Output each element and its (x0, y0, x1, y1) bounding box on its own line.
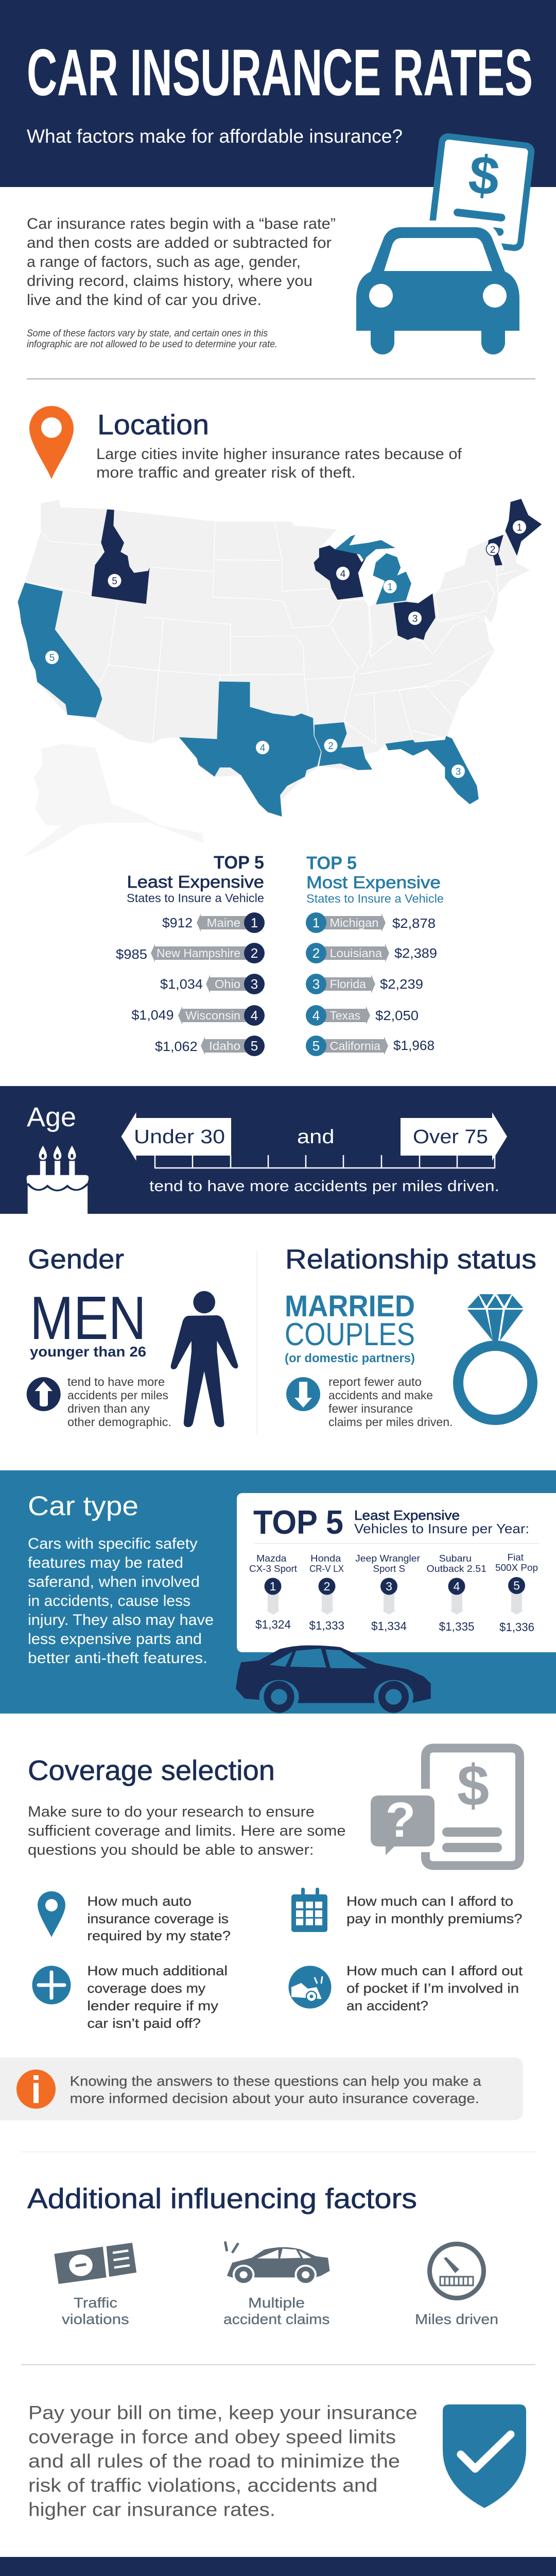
text block: relationship statement: report fewer auto (328, 1375, 422, 1388)
vehicle: Mazda: Mazda (256, 1553, 287, 1564)
icon: document with question bubble (371, 1748, 520, 1866)
text block: car type description: injury. They also may have (28, 1612, 214, 1629)
heading: age: Age (27, 1102, 76, 1132)
subheading (354, 1507, 529, 1536)
row: Florida: $2,239 (380, 976, 423, 992)
state: Florida (386, 736, 479, 804)
label: accident claims (223, 2295, 329, 2327)
vehicle: Mazda: CX-3 Sport (249, 1564, 297, 1574)
callout text (70, 2074, 481, 2106)
label: traffic violations (62, 2295, 129, 2327)
map labels: 1 (387, 582, 393, 593)
arrow: over 75: Over 75 (413, 1126, 488, 1148)
text: men: MEN (30, 1284, 146, 1352)
map labels: 2 (490, 545, 495, 555)
text block: relationship statement: accidents and make (328, 1388, 433, 1402)
row: Idaho: 5 (251, 1038, 258, 1054)
question: lender coverage: How much additional (87, 1963, 228, 1978)
subheading: Vehicles to Insure per Year: (354, 1521, 529, 1536)
heading: coverage selection: Coverage selection (28, 1754, 275, 1786)
vehicle: Subaru (426, 1553, 486, 1633)
heading: least expensive: TOP 5 (214, 853, 264, 873)
map: United States (18, 499, 542, 858)
row: New Hampshire: New Hampshire (157, 946, 240, 960)
text block: intro: driving record, claims history, where you (27, 273, 312, 290)
vehicle: Fiat: $1,336 (499, 1620, 534, 1634)
text block: closing advice: Pay your bill on time, keep your insurance (28, 2402, 418, 2424)
text block: gender statement (67, 1375, 171, 1429)
row: Idaho: Idaho (209, 1039, 240, 1053)
question: lender coverage (32, 1963, 228, 2031)
row: Florida: 3 (312, 976, 320, 992)
text block: gender statement: other demographic. (67, 1415, 171, 1429)
vehicle: Honda: CR-V LX (309, 1564, 344, 1574)
text: married couples: (or domestic partners) (285, 1351, 415, 1365)
text block: intro: and then costs are added or subtracted for (27, 234, 332, 251)
heading: top 5: TOP 5 (253, 1503, 343, 1541)
map labels: 3 (412, 614, 418, 624)
panel: age (0, 1086, 556, 1214)
row: Louisiana: 2 (312, 945, 320, 961)
question: out of pocket: of pocket if I’m involved in (346, 1980, 519, 1996)
panel: additional influencing factors (27, 2182, 498, 2327)
row: California (306, 1036, 435, 1056)
heading: most expensive (306, 853, 444, 905)
heading: most expensive: States to Insure a Vehicle (306, 892, 444, 905)
heading: least expensive (127, 853, 264, 905)
state: Texas (179, 682, 321, 817)
label: traffic violations: Traffic (74, 2295, 117, 2311)
vehicle: Honda: 2 (324, 1580, 330, 1593)
question: out of pocket: How much can I afford out (346, 1963, 523, 1978)
text block: relationship statement: fewer insurance (328, 1402, 413, 1415)
icon: car with insurance bill: $ (466, 144, 502, 208)
text block: intro: a range of factors, such as age, gender, (27, 253, 301, 270)
text block: location description: Large cities invite higher insurance rates because of (96, 446, 462, 463)
vehicle: Subaru: $1,335 (439, 1620, 475, 1633)
row: Maine: 1 (251, 915, 258, 930)
row: Wisconsin: $1,049 (132, 1007, 174, 1023)
text block: gender statement: accidents per miles (67, 1388, 168, 1402)
vehicle: Fiat: 500X Pop (495, 1563, 538, 1573)
question: state coverage: required by my state? (87, 1928, 231, 1943)
row: Louisiana: $2,389 (394, 945, 437, 961)
question: out of pocket: an accident? (346, 1998, 428, 2013)
text block: intro: Car insurance rates begin with a “base rate” (27, 215, 336, 232)
row: Wisconsin: 4 (251, 1008, 258, 1023)
row: Wisconsin: Wisconsin (185, 1009, 240, 1022)
map labels: 4 (340, 569, 346, 580)
text: married couples: COUPLES (285, 1317, 415, 1352)
text: married couples (285, 1290, 415, 1365)
text block: intro: live and the kind of car you drive. (27, 292, 262, 309)
icon: crashed car (225, 2242, 329, 2285)
heading: additional factors: Additional influencing factors (27, 2182, 417, 2214)
map labels: 5 (112, 576, 117, 587)
vehicle: Jeep Wrangler: 3 (386, 1580, 392, 1593)
heading: least expensive: States to Insure a Vehicle (127, 891, 264, 905)
map labels: 4 (260, 743, 266, 754)
state: Michigan (335, 535, 411, 604)
arrow: over 75 (401, 1112, 507, 1161)
vehicle: Honda: $1,333 (309, 1619, 344, 1632)
text block: location description (96, 446, 462, 481)
row: Ohio: Ohio (215, 977, 240, 991)
heading: most expensive: TOP 5 (306, 853, 357, 873)
text block: disclaimer: Some of these factors vary by state, and certain ones in this (27, 328, 268, 339)
text block: gender statement: driven than any (67, 1402, 150, 1415)
question: out of pocket (288, 1963, 523, 2013)
icon: man (171, 1291, 238, 1427)
row: California: 5 (312, 1038, 320, 1054)
icon: document with question bubble: ? (386, 1792, 415, 1848)
row: Maine: $912 (162, 915, 193, 930)
row: California: California (329, 1039, 380, 1053)
row: Michigan: 1 (312, 915, 320, 930)
vehicle: Jeep Wrangler: $1,334 (371, 1619, 407, 1633)
subtitle: What factors make for affordable insurance? (27, 126, 403, 147)
text block: location description: more traffic and greater risk of theft. (96, 464, 356, 481)
text block: car type description: better anti-theft features. (28, 1650, 207, 1667)
text block: coverage description: Make sure to do your research to ensure (28, 1804, 315, 1820)
question: monthly premiums: pay in monthly premiums? (346, 1911, 522, 1926)
row: California: $1,968 (393, 1038, 435, 1053)
heading: most expensive: Most Expensive (306, 873, 441, 892)
heading: gender: Gender (28, 1244, 124, 1275)
text block: relationship statement: claims per miles driven. (328, 1415, 453, 1429)
icon: car with insurance bill (356, 132, 535, 354)
vehicle: Fiat: 5 (513, 1579, 520, 1592)
state: New Hampshire (488, 535, 503, 566)
icon: location pin (29, 406, 74, 479)
text block: relationship statement (328, 1375, 453, 1429)
text: younger than 26: younger than 26 (30, 1344, 146, 1360)
row: New Hampshire (116, 943, 265, 963)
text block: closing advice: and all rules of the road to minimize the (28, 2451, 400, 2472)
text block: car type description (28, 1535, 214, 1667)
panel: coverage selection (0, 1748, 523, 2121)
state: Maine (505, 499, 542, 556)
icon: diamond ring (458, 1294, 532, 1420)
icon: gauge (429, 2244, 484, 2298)
row: Idaho: $1,062 (155, 1039, 198, 1054)
map labels: 5 (49, 653, 55, 664)
vehicle: Fiat (495, 1552, 538, 1634)
vehicle: Subaru: 4 (454, 1580, 460, 1593)
vehicle: Honda (309, 1553, 344, 1632)
icon: document with question bubble: $ (457, 1753, 489, 1818)
question: state coverage (38, 1891, 231, 1943)
row: Texas: 4 (312, 1008, 320, 1023)
panel: header (0, 0, 556, 187)
text block: car type description: in accidents, cause less (28, 1592, 190, 1609)
text: married couples: MARRIED (285, 1290, 415, 1323)
panel: car type (0, 1470, 556, 1714)
vehicle: Jeep Wrangler: Sport S (373, 1564, 405, 1574)
map labels (45, 520, 526, 778)
label: accident claims: Multiple (248, 2295, 305, 2311)
text block: car type description: less expensive parts and (28, 1631, 202, 1648)
text block: coverage description (28, 1804, 346, 1858)
panel: most expensive states (306, 853, 444, 1056)
text block: car type description: Cars with specific safety (28, 1535, 198, 1552)
row: New Hampshire: 2 (251, 945, 258, 961)
row: Texas (306, 1005, 419, 1026)
label: accident claims: accident claims (223, 2311, 329, 2327)
text block: coverage description: sufficient coverage and limits. Here are some (28, 1823, 346, 1839)
row: Ohio (160, 974, 265, 994)
question: monthly premiums (291, 1888, 522, 1932)
icon: shield with check (443, 2404, 526, 2508)
text block: intro (27, 215, 336, 309)
state: Idaho (92, 510, 150, 604)
vehicle: Subaru: Subaru (439, 1553, 472, 1564)
heading: least expensive: Least Expensive (127, 872, 264, 891)
state: Louisiana (315, 722, 372, 770)
map labels: 1 (517, 522, 522, 533)
panel: gender (27, 1244, 238, 1429)
question: state coverage: How much auto (87, 1893, 192, 1909)
arrow: under 30: Under 30 (134, 1126, 225, 1148)
subheading: Least Expensive (354, 1507, 460, 1523)
row: Maine: Maine (207, 916, 240, 929)
callout: info (0, 2058, 523, 2121)
text block: gender statement: tend to have more (67, 1375, 165, 1388)
vehicle: Honda: Honda (310, 1553, 342, 1564)
row: Louisiana: Louisiana (329, 946, 382, 960)
row: Michigan (306, 912, 436, 933)
heading: location: Location (97, 409, 209, 440)
vehicle: Mazda (249, 1553, 297, 1631)
text block: closing advice: higher car insurance rates. (28, 2499, 275, 2520)
row: Wisconsin (132, 1005, 265, 1026)
question: monthly premiums: How much can I afford to (346, 1893, 513, 1909)
panel: relationship status (285, 1244, 536, 1429)
text block: closing advice (28, 2402, 418, 2520)
row: Florida (306, 974, 423, 994)
state: Wisconsin (314, 545, 367, 600)
vehicle: Subaru: Outback 2.51 (426, 1564, 486, 1574)
text: and: and (297, 1126, 335, 1148)
icon: sedan (236, 1646, 431, 1714)
icon: down arrow (286, 1377, 320, 1411)
row: Michigan: $2,878 (392, 916, 436, 931)
text block: closing advice: coverage in force and obey speed limits (28, 2427, 396, 2448)
icon: birthday cake (27, 1146, 89, 1214)
state: Ohio (393, 594, 436, 640)
row: Louisiana (306, 943, 437, 963)
vehicle: Mazda: 1 (270, 1580, 276, 1593)
text block: car type description: saferand, when involved (28, 1573, 200, 1590)
row: Idaho (155, 1036, 265, 1056)
heading: car type: Car type (28, 1491, 138, 1521)
question: state coverage: insurance coverage is (87, 1911, 229, 1926)
label: miles driven: Miles driven (415, 2311, 498, 2327)
arrow: under 30 (121, 1112, 231, 1161)
text block: coverage description: questions you should be able to answer: (28, 1842, 314, 1858)
question: lender coverage: car isn’t paid off? (87, 2015, 201, 2031)
question: lender coverage: lender require if my (87, 1998, 218, 2013)
row: Ohio: $1,034 (160, 976, 203, 992)
row: Texas: Texas (329, 1009, 360, 1022)
map labels: 3 (456, 767, 461, 777)
callout text: Knowing the answers to these questions can help you make a (70, 2074, 481, 2089)
icon: info (16, 2070, 56, 2109)
label: traffic violations: violations (62, 2311, 129, 2327)
text block: car type description: features may be rated (28, 1554, 183, 1571)
icon: up arrow (27, 1377, 61, 1411)
state: California (18, 583, 102, 718)
vehicle: Mazda: $1,324 (255, 1618, 291, 1631)
row: Florida: Florida (329, 977, 366, 991)
vehicle: Fiat: Fiat (508, 1552, 524, 1563)
row: Michigan: Michigan (329, 916, 379, 929)
vehicle: Jeep Wrangler: Jeep Wrangler (355, 1553, 420, 1564)
row: Ohio: 3 (251, 976, 258, 992)
map labels: 2 (328, 741, 334, 752)
heading: relationship status: Relationship status (285, 1244, 536, 1275)
callout text: more informed decision about your auto insurance coverage. (70, 2091, 479, 2106)
row: New Hampshire: $985 (116, 946, 147, 962)
text block: closing advice: risk of traffic violations, accidents and (28, 2475, 378, 2496)
text block: disclaimer (27, 328, 277, 350)
icon: ticket (54, 2243, 136, 2284)
panel: least expensive states (116, 853, 265, 1056)
question: lender coverage: coverage does my (87, 1980, 205, 1996)
panel: footer (0, 2557, 556, 2576)
card: top 5 vehicles (237, 1493, 556, 1652)
row: Maine (162, 912, 265, 933)
vehicle: Jeep Wrangler (355, 1553, 420, 1633)
ruler (154, 1155, 495, 1168)
row: Texas: $2,050 (375, 1008, 419, 1023)
text: age statement: tend to have more accidents per miles driven. (149, 1178, 499, 1195)
text block: disclaimer: infographic are not allowed to be used to determine your rate. (27, 339, 277, 350)
